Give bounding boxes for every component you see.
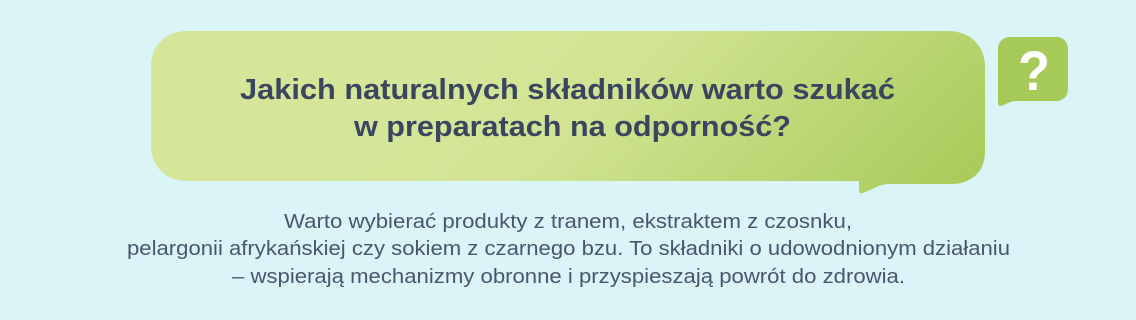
heading: w preparatach na odporność? — [353, 111, 791, 143]
panel: question speech bubble — [151, 31, 985, 193]
icon: question mark bubble — [998, 37, 1068, 106]
text block: answer: – wspierają mechanizmy obronne i przyspieszają powrót do zdrowia. — [232, 266, 905, 288]
text block: answer: Warto wybierać produkty z tranem, ekstraktem z czosnku, — [284, 211, 852, 233]
heading: Jakich naturalnych składników warto szukać — [240, 74, 895, 106]
heading — [240, 74, 895, 143]
text block: answer — [127, 211, 1010, 288]
icon: question mark bubble: ? — [1018, 39, 1050, 102]
text block: answer: pelargonii afrykańskiej czy sokiem z czarnego bzu. To składniki o udowodnionym działaniu — [127, 238, 1010, 260]
